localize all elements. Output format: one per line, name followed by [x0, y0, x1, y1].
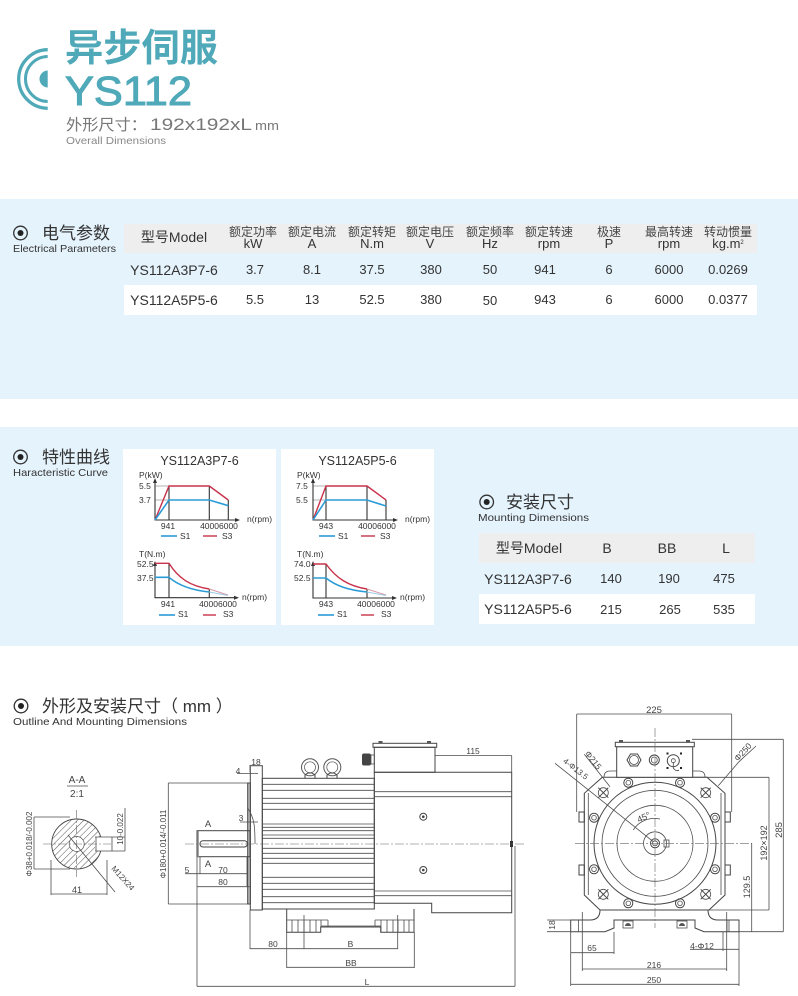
table header: [496, 540, 730, 556]
dimension lines: B: [348, 939, 354, 949]
section label: 2:1: [70, 789, 84, 800]
dimension lines: [547, 705, 785, 986]
section label: [67, 775, 88, 800]
chart: power curve: P(kW): [297, 470, 321, 480]
section label: A-A: [69, 775, 86, 786]
legend: torque curve: [318, 609, 392, 619]
table header: Hz: [482, 236, 498, 251]
dimension lines: 80: [218, 877, 228, 887]
dimension lines: 18: [251, 757, 261, 767]
table row 1: 380: [420, 262, 442, 277]
chart: torque curve: T(N.m): [297, 549, 324, 559]
dimension lines: 4-Φ12: [690, 941, 714, 951]
dimension lines: [159, 746, 515, 987]
table row 2: 50: [483, 293, 497, 308]
dimension lines: L: [365, 977, 370, 987]
dimensions: 10-0.022: [116, 813, 125, 845]
table header: 额定电流: [288, 224, 336, 239]
chart: power curve: 40006000: [200, 521, 238, 531]
chart: power curve: n(rpm): [405, 514, 430, 524]
heading English: Mounting Dimensions: [478, 512, 589, 524]
dimension lines: A: [205, 859, 212, 870]
mounting bolts: [590, 778, 720, 908]
table: electrical parameters: [124, 224, 757, 315]
heading English: Outline And Mounting Dimensions: [13, 716, 187, 728]
heading English: Haracteristic Curve: [13, 467, 108, 479]
table header: 额定转矩: [348, 224, 396, 239]
chart: torque curve: 943: [319, 599, 333, 609]
legend: torque curve: S3: [223, 609, 234, 619]
table header: 极速: [597, 225, 621, 239]
table: mounting dimensions: [479, 533, 755, 624]
legend: power curve: [161, 531, 233, 541]
heading: electrical parameters: 电气参数: [42, 224, 110, 243]
dimension lines: 4: [236, 766, 241, 776]
base: [287, 909, 414, 932]
table row 2: 535: [713, 602, 735, 617]
table header: L: [722, 540, 730, 556]
table row 1: YS112A3P7-6: [484, 571, 572, 587]
table row 2: 52.5: [359, 292, 385, 307]
chart: torque curve: n(rpm): [242, 592, 267, 602]
section heading: outline and mounting dimensions: [13, 697, 233, 728]
table header: 额定功率: [229, 224, 277, 239]
table row 2: 6000: [655, 292, 683, 307]
table header: kW: [244, 236, 263, 251]
table row 1: 6: [605, 262, 613, 277]
panel: characteristic curves and mounting dimensions: [0, 427, 798, 646]
table header: 额定转速: [525, 224, 573, 239]
table row 1: [130, 262, 748, 278]
dimensions: M12X24: [110, 864, 137, 893]
icon: section bullet: [14, 226, 27, 240]
chart: torque curve: [294, 549, 425, 609]
table row 2: [130, 292, 748, 308]
table header: 额定电压: [406, 224, 454, 239]
chart: power curve: P(kW): [139, 470, 163, 480]
icon: section bullet: [14, 450, 27, 464]
table row 1: 37.5: [359, 262, 385, 277]
table row 1: 8.1: [303, 262, 321, 277]
table row 1: 6000: [655, 262, 683, 277]
icon: lifting eye bolts: [302, 759, 341, 778]
heading English: Electrical Parameters: [13, 243, 116, 255]
concentric circles: [594, 782, 716, 904]
dimensions: Φ38+0.018/-0.002: [25, 811, 34, 876]
legend: torque curve: S3: [381, 609, 392, 619]
terminal box: [615, 740, 694, 777]
chart title: YS112A3P7-6: [160, 454, 239, 468]
dimensions: [25, 808, 137, 895]
overall dimensions value: [66, 115, 279, 134]
icon: section bullet: [14, 699, 28, 713]
table row 1: 0.0269: [708, 262, 748, 277]
dimension lines: 45°: [635, 810, 652, 825]
table row 1: 475: [713, 571, 735, 586]
table row 2: YS112A5P5-6: [130, 292, 218, 308]
dimension lines: 129.5: [742, 876, 752, 898]
table row 2: 943: [534, 292, 556, 307]
chart title: YS112A5P5-6: [318, 454, 397, 468]
table row 2: 5.5: [246, 292, 264, 307]
dimension lines: BB: [345, 958, 357, 968]
table header: 2: [740, 240, 744, 246]
table row 1: 50: [483, 262, 497, 277]
table row 1: YS112A3P7-6: [130, 262, 218, 278]
dimension lines: Φ215: [583, 749, 604, 772]
title: Chinese product name: 异步伺服: [65, 28, 218, 70]
table header: rpm: [538, 236, 560, 251]
chart: torque curve: 37.5: [137, 573, 154, 583]
chart: power curve: 5.5: [139, 481, 151, 491]
motor body with fins: [262, 778, 374, 909]
rear section: [374, 772, 513, 913]
chart: power curve: 7.5: [296, 481, 308, 491]
chart: torque curve: 40006000: [199, 599, 237, 609]
housing outline: [571, 771, 739, 932]
icon: logo arcs: [17, 48, 48, 110]
table header: B: [602, 540, 612, 556]
chart: power curve: n(rpm): [247, 514, 272, 524]
table row 1: 941: [534, 262, 556, 277]
chart: torque curve: 52.5: [294, 573, 311, 583]
chart: power curve: 941: [161, 521, 175, 531]
legend: power curve: S1: [180, 531, 191, 541]
dimension lines: 115: [466, 746, 480, 756]
dimension lines: 285: [774, 822, 785, 838]
table header: rpm: [658, 236, 680, 251]
table row 1: 190: [658, 571, 680, 586]
legend: power curve: [319, 531, 391, 541]
overall dimensions value: 192x192xL: [150, 115, 252, 134]
dimension lines: 3: [239, 813, 244, 823]
panel: electrical parameters: [0, 199, 798, 399]
dimension lines: 4-Φ13.5: [561, 757, 590, 782]
side lugs and base slots: [579, 812, 730, 928]
legend: torque curve: S1: [337, 609, 348, 619]
dimension lines: 70: [218, 865, 228, 875]
dimension lines: 65: [587, 943, 597, 953]
table header: V: [426, 236, 435, 251]
overall dimensions value: 外形尺寸：: [66, 116, 147, 134]
table header: A: [308, 236, 317, 251]
table row 2: 13: [305, 292, 319, 307]
legend: power curve: S1: [338, 531, 349, 541]
drawing: side view: [159, 741, 526, 987]
dimensions: 41: [72, 885, 82, 895]
chart: torque curve: 52.5: [137, 559, 154, 569]
table header: BB: [658, 540, 676, 556]
dimension lines: Φ250: [732, 741, 754, 763]
table row 2: 215: [600, 602, 622, 617]
icon: section bullet: [480, 495, 494, 509]
dimension lines: 216: [647, 960, 661, 970]
table row 2: 0.0377: [708, 292, 748, 307]
drawing: front view: [547, 705, 785, 986]
table row 1: [484, 571, 735, 587]
chart: torque curve: n(rpm): [400, 592, 425, 602]
legend: power curve: S3: [222, 531, 233, 541]
table header: 型号Model: [141, 229, 207, 245]
chart: power curve: 40006000: [358, 521, 396, 531]
table row 1: 3.7: [246, 262, 264, 277]
dimension lines: 225: [646, 705, 662, 716]
overall dimensions English label: Overall Dimensions: [66, 135, 166, 147]
chart: torque curve: 40006000: [357, 599, 395, 609]
center line: [185, 843, 526, 845]
table header: N.m: [360, 236, 384, 251]
table row 2: [484, 601, 735, 617]
flange and shaft: [197, 766, 262, 910]
heading: mounting dimensions: 安装尺寸: [506, 493, 574, 512]
legend: torque curve: S1: [178, 609, 189, 619]
chart panel: YS112A3P7-6: [123, 449, 276, 625]
heading: 外形及安装尺寸（ mm ）: [42, 697, 233, 716]
table header: [141, 224, 752, 251]
table header: kg.m: [712, 236, 740, 251]
chart: power curve: [139, 470, 272, 531]
chart: torque curve: 74.0: [294, 559, 311, 569]
chart: power curve: 943: [319, 521, 333, 531]
chart: torque curve: [137, 549, 267, 609]
dimension lines: 250: [647, 975, 661, 985]
chart: power curve: 3.7: [139, 495, 151, 505]
table row 2: YS112A5P5-6: [484, 601, 572, 617]
dimension lines: 80: [268, 939, 278, 949]
table header: P: [605, 236, 613, 251]
table header: 最高转速: [645, 224, 693, 239]
table row 2: 6: [605, 292, 613, 307]
chart: torque curve: 941: [161, 599, 175, 609]
table header: 转动惯量: [704, 224, 752, 239]
chart: power curve: [296, 470, 430, 531]
legend: torque curve: [159, 609, 234, 619]
corner holes: [598, 788, 711, 899]
chart panel: YS112A5P5-6: [281, 449, 434, 625]
legend: power curve: S3: [380, 531, 391, 541]
center lines: [575, 728, 752, 928]
overall dimensions value: mm: [255, 119, 279, 133]
table header: 型号Model: [496, 540, 562, 556]
table row 1: 140: [600, 571, 622, 586]
title: model: YS112: [65, 68, 192, 114]
terminal box: [362, 741, 437, 772]
dimension lines: 18: [547, 920, 557, 930]
header: title block: [19, 28, 279, 147]
dimension lines: 192×192: [759, 825, 769, 861]
table header: 额定频率: [466, 224, 514, 239]
chart: torque curve: T(N.m): [139, 549, 166, 559]
shaft cross-section: [43, 810, 125, 877]
dimension lines: A: [205, 819, 212, 830]
dimension lines: 5: [185, 865, 190, 875]
chart: power curve: 5.5: [296, 495, 308, 505]
heading: characteristic curve: 特性曲线: [42, 448, 110, 467]
table row 2: 265: [659, 602, 681, 617]
table row 2: 380: [420, 292, 442, 307]
dimension lines: Φ180+0.014/-0.011: [159, 809, 168, 878]
drawing: section A-A: [25, 775, 137, 895]
